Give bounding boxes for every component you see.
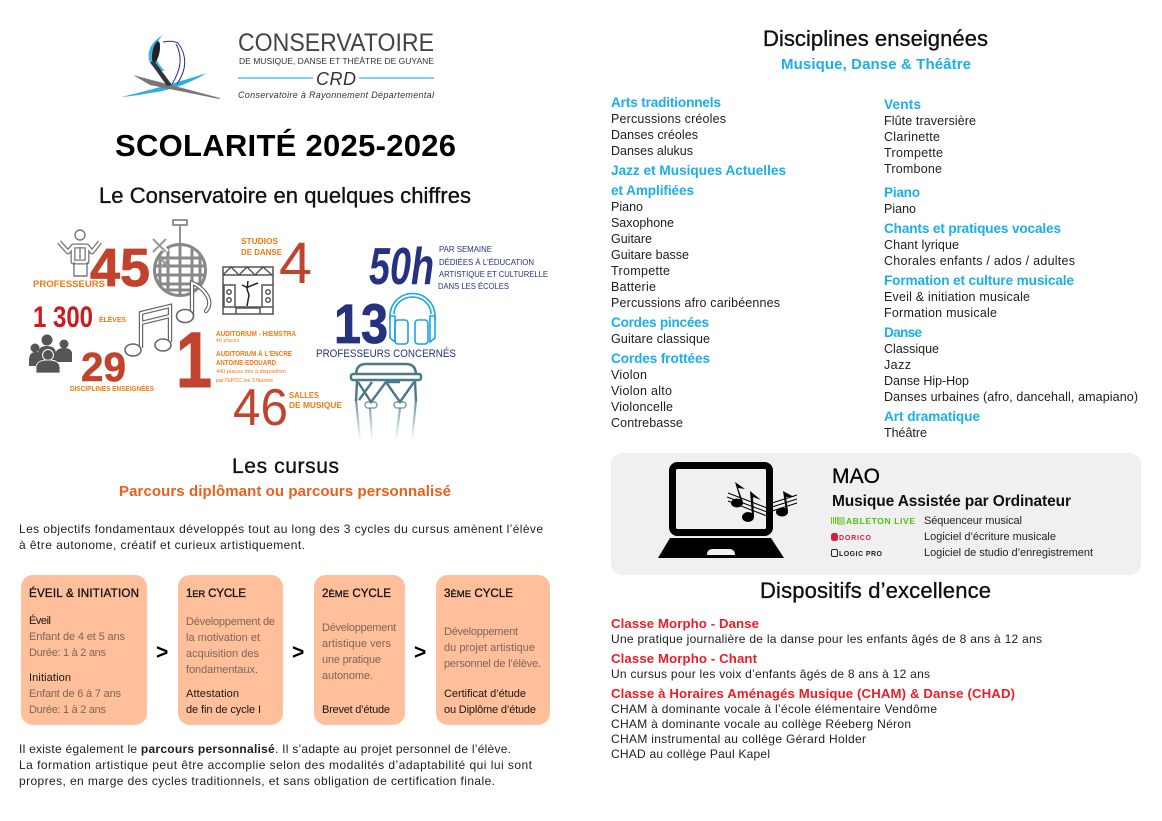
panel: 2ème cycle: 2ÈME CYCLE: [322, 587, 391, 600]
figure: 1300 students: ÉLÈVES: [99, 315, 126, 324]
icon: big music note: [125, 306, 171, 356]
heading: musique assistée: Musique Assistée par Ordinateur: [832, 493, 1071, 510]
figure: dance studios: STUDIOS: [241, 237, 279, 246]
list: dispositifs d'excellence: [611, 616, 1042, 761]
figure: 50h per week: DANS LES ÉCOLES: [438, 282, 509, 291]
figure: 1 auditorium: 40 places: [216, 338, 240, 344]
panel: 2ème cycle: [314, 575, 405, 725]
icon: disco ball: [153, 220, 206, 296]
icon: small music note: [176, 283, 209, 322]
panel: éveil et initiation: Durée: 1 à 2 ans: [29, 704, 106, 716]
list: disciplines column 2: Flûte traversière: [884, 114, 976, 128]
figure: 46 music rooms: DE MUSIQUE: [289, 401, 343, 410]
panel: éveil et initiation: Enfant de 4 et 5 ans: [29, 631, 126, 643]
list: disciplines column 1: [611, 95, 786, 430]
figure: 29 disciplines: 29: [81, 344, 126, 390]
panel: 3ème cycle: Certificat d’étude: [444, 688, 526, 700]
list: disciplines column 2: Art dramatique: [884, 409, 980, 424]
list: dispositifs d'excellence: Un cursus pour les voix d’enfants âgés de 8 ans à 12 ans: [611, 667, 930, 681]
list: dispositifs d'excellence: CHAM à dominante vocale à l’école élémentaire Vendôme: [611, 702, 937, 716]
figure: 50h per week: PAR SEMAINE: [439, 245, 492, 254]
list: disciplines column 2: Trompette: [884, 146, 943, 160]
figure: 50h per week: 50h: [369, 238, 434, 296]
list: disciplines column 1: Percussions créoles: [611, 112, 726, 126]
list: disciplines column 2: Jazz: [884, 358, 911, 372]
list: disciplines column 2: Trombone: [884, 162, 942, 176]
list: disciplines column 2: Clarinette: [884, 130, 940, 144]
icon: stage: [223, 267, 273, 314]
panel: 3ème cycle: Développement: [444, 626, 518, 638]
heading: key figures: Le Conservatoire en quelques chiffres: [99, 183, 471, 208]
panel: 1er cycle: Développement de: [186, 616, 275, 628]
list: disciplines column 1: Piano: [611, 200, 643, 214]
figure: 1 auditorium: ANTOINE-EDOUARD: [216, 360, 276, 367]
figure: 29 disciplines: [70, 344, 154, 393]
panel: éveil et initiation: Enfant de 6 à 7 ans: [29, 688, 122, 700]
panel: key figures infographic: [29, 220, 548, 440]
panel: 3ème cycle: du projet artistique: [444, 642, 535, 654]
figure: dance studios: DE DANSE: [241, 248, 283, 257]
list: dispositifs d'excellence: CHAM instrumental au collège Gérard Holder: [611, 732, 866, 746]
icon: headphones: [390, 294, 435, 344]
panel: 1er cycle: de fin de cycle I: [186, 704, 261, 716]
list: disciplines column 1: Violon: [611, 368, 647, 382]
panel: 1er cycle: acquisition des: [186, 648, 260, 660]
subheading: musique danse théâtre: Musique, Danse & Théâtre: [781, 56, 971, 73]
list: disciplines column 2: Chant lyrique: [884, 238, 959, 252]
panel: 2ème cycle: autonome.: [322, 670, 373, 682]
figure: 46 music rooms: [233, 379, 343, 437]
subheading: parcours: Parcours diplômant ou parcours personnalisé: [119, 483, 451, 500]
figure: 13 teachers: 13: [334, 292, 388, 355]
list: dispositifs d'excellence: Classe Morpho - Danse: [611, 616, 759, 631]
panel: 1er cycle: 1ER CYCLE: [186, 587, 246, 600]
list: disciplines column 2: Classique: [884, 342, 939, 356]
panel: MAO: Logiciel de studio d’enregistrement: [924, 547, 1093, 559]
panel: 2ème cycle: Développement: [322, 622, 396, 634]
figure: 1 auditorium: 440 places mis à disposition: [216, 369, 286, 375]
figure: dance studios: 4: [279, 231, 312, 296]
list: disciplines column 1: Contrebasse: [611, 416, 683, 430]
panel: MAO: Logiciel d’écriture musicale: [924, 531, 1056, 543]
icon: group of people: [29, 334, 72, 373]
text block: parcours personnalisé: [19, 742, 533, 788]
logo: Conservatoire de Guyane: CONSERVATOIRE: [238, 29, 434, 57]
list: dispositifs d'excellence: Une pratique journalière de la danse pour les enfants âgés de 8 ans à 12 ans: [611, 632, 1042, 646]
text block: objectives: Les objectifs fondamentaux développés tout au long des 3 cycles du cursus amènent l’élève: [19, 522, 543, 536]
list: disciplines column 1: Trompette: [611, 264, 670, 278]
figure: 1 auditorium: AUDITORIUM À L'ENCRE: [216, 349, 292, 358]
logo: Conservatoire de Guyane: [121, 29, 435, 100]
figure: dance studios: [241, 231, 312, 296]
panel: 3ème cycle: [436, 575, 550, 725]
panel: éveil et initiation: Éveil: [29, 614, 51, 627]
logo: Ableton Live: ABLETON LIVE: [846, 516, 915, 526]
list: dispositifs d'excellence: CHAM à dominante vocale au collège Réeberg Néron: [611, 717, 911, 731]
panel: 2ème cycle: Brevet d’étude: [322, 704, 390, 716]
list: disciplines column 1: Cordes pincées: [611, 315, 709, 330]
list: disciplines column 1: Danses alukus: [611, 144, 693, 158]
list: disciplines column 1: Percussions afro caribéennes: [611, 296, 780, 310]
list: disciplines column 1: et Amplifiées: [611, 183, 694, 198]
list: disciplines column 1: Guitare: [611, 232, 652, 246]
list: disciplines column 1: Batterie: [611, 280, 656, 294]
list: disciplines column 1: Guitare basse: [611, 248, 689, 262]
list: disciplines column 2: Danse Hip-Hop: [884, 374, 969, 388]
list: disciplines column 2: Eveil & initiation musicale: [884, 290, 1030, 304]
list: disciplines column 1: Violon alto: [611, 384, 672, 398]
panel: 3ème cycle: personnel de l’élève.: [444, 658, 541, 670]
figure: 1 auditorium: [176, 315, 296, 404]
list: dispositifs d'excellence: Classe à Horaires Aménagés Musique (CHAM) & Danse (CHAD): [611, 686, 1015, 701]
arrow: >: [292, 641, 304, 664]
figure: 50h per week: ARTISTIQUE ET CULTURELLE: [439, 270, 548, 279]
list: disciplines column 2: Théâtre: [884, 426, 927, 440]
logo: Logic Pro: [832, 550, 883, 558]
figure: 46 music rooms: 46: [233, 379, 288, 437]
logo: Conservatoire de Guyane: DE MUSIQUE, DANSE ET THÉÂTRE DE GUYANE: [239, 56, 434, 66]
text block: objectives: [19, 522, 543, 552]
icon: laptop with music notes: [658, 466, 797, 558]
figure: 1 auditorium: 1: [176, 315, 212, 404]
list: disciplines column 2: Vents: [884, 97, 921, 112]
list: disciplines column 1: Violoncelle: [611, 400, 673, 414]
panel: 1er cycle: fondamentaux.: [186, 664, 258, 676]
panel: MAO: Séquenceur musical: [924, 515, 1022, 527]
text block: parcours personnalisé: Il existe également le parcours personnalisé. Il s’adapte au projet personnel de l’élève.: [19, 742, 511, 756]
list: disciplines column 2: Chorales enfants / ados / adultes: [884, 254, 1075, 268]
figure: 50h per week: [369, 238, 548, 296]
list: disciplines column 1: Danses créoles: [611, 128, 698, 142]
heading: MAO: MAO: [832, 465, 880, 488]
figure: 45 professors: PROFESSEURS: [33, 279, 105, 290]
panel: 1er cycle: [178, 575, 283, 725]
panel: 3ème cycle: 3ÈME CYCLE: [444, 587, 513, 600]
icon: conductor: [59, 230, 100, 276]
icon: drum: [351, 364, 421, 440]
figure: 46 music rooms: SALLES: [289, 391, 320, 400]
figure: 45 professors: [33, 238, 150, 298]
figure: 1300 students: 1 300: [33, 301, 93, 334]
logo: Logic Pro: LOGIC PRO: [839, 551, 883, 558]
list: disciplines column 1: Arts traditionnels: [611, 95, 721, 110]
arrow: >: [156, 641, 168, 664]
panel: éveil et initiation: ÉVEIL & INITIATION: [29, 587, 139, 600]
panel: 3ème cycle: ou Diplôme d’étude: [444, 704, 536, 716]
arrow: >: [414, 641, 426, 664]
title: SCOLARITÉ 2025-2026: [115, 128, 456, 163]
panel: 2ème cycle: une pratique: [322, 654, 381, 666]
text block: parcours personnalisé: propres, en marge des cycles traditionnels, et sans obligation de certification finale.: [19, 774, 495, 788]
list: disciplines column 2: Formation et culture musicale: [884, 273, 1074, 288]
list: disciplines column 2: Piano: [884, 202, 916, 216]
list: dispositifs d'excellence: CHAD au collège Paul Kapel: [611, 747, 770, 761]
list: disciplines column 1: Cordes frottées: [611, 351, 710, 366]
figure: 29 disciplines: DISCIPLINES ENSEIGNÉES: [70, 384, 154, 393]
panel: éveil et initiation: Initiation: [29, 672, 71, 684]
list: disciplines column 2: Chants et pratiques vocales: [884, 221, 1061, 236]
list: disciplines column 1: Jazz et Musiques Actuelles: [611, 163, 786, 178]
logo: Conservatoire de Guyane: Conservatoire à Rayonnement Départemental: [238, 90, 435, 100]
text block: parcours personnalisé: La formation artistique peut être accomplie selon des modalités d’adaptabilité qui lui sont: [19, 758, 533, 772]
panel: MAO: [611, 453, 1141, 575]
heading: dispositifs: Dispositifs d’excellence: [760, 578, 991, 603]
logo: Dorico: DORICO: [839, 535, 872, 542]
text block: objectives: à être autonome, créatif et curieux artistiquement.: [19, 538, 305, 552]
panel: 1er cycle: Attestation: [186, 688, 239, 700]
panel: éveil et initiation: Durée: 1 à 2 ans: [29, 647, 106, 659]
list: disciplines column 1: Guitare classique: [611, 332, 710, 346]
figure: 13 teachers: PROFESSEURS CONCERNÉS: [316, 347, 456, 360]
list: disciplines column 2: [884, 97, 1138, 440]
logo: Conservatoire de Guyane: CRD: [316, 69, 356, 89]
heading: disciplines: Disciplines enseignées: [763, 26, 988, 51]
list: disciplines column 2: Piano: [884, 185, 920, 200]
panel: éveil et initiation: [21, 575, 147, 725]
panel: 2ème cycle: artistique vers: [322, 638, 392, 650]
panel: 1er cycle: la motivation et: [186, 632, 260, 644]
figure: 1 auditorium: par l'EPCC les 3 fleuves: [216, 378, 273, 384]
list: disciplines column 1: Saxophone: [611, 216, 674, 230]
figure: 13 teachers: [316, 292, 456, 360]
figure: 45 professors: 45: [90, 238, 150, 298]
heading: les cursus: Les cursus: [232, 455, 339, 478]
list: disciplines column 2: Danses urbaines (afro, dancehall, amapiano): [884, 390, 1138, 404]
list: dispositifs d'excellence: Classe Morpho - Chant: [611, 651, 758, 666]
figure: 1 auditorium: AUDITORIUM - HIEMSTRA: [216, 331, 296, 338]
list: disciplines column 2: Formation musicale: [884, 306, 997, 320]
list: disciplines column 2: Danse: [884, 325, 922, 340]
logo emblem: [121, 35, 220, 99]
logo: Dorico: [831, 533, 872, 542]
figure: 50h per week: DÉDIÉES À L'ÉDUCATION: [439, 258, 534, 267]
